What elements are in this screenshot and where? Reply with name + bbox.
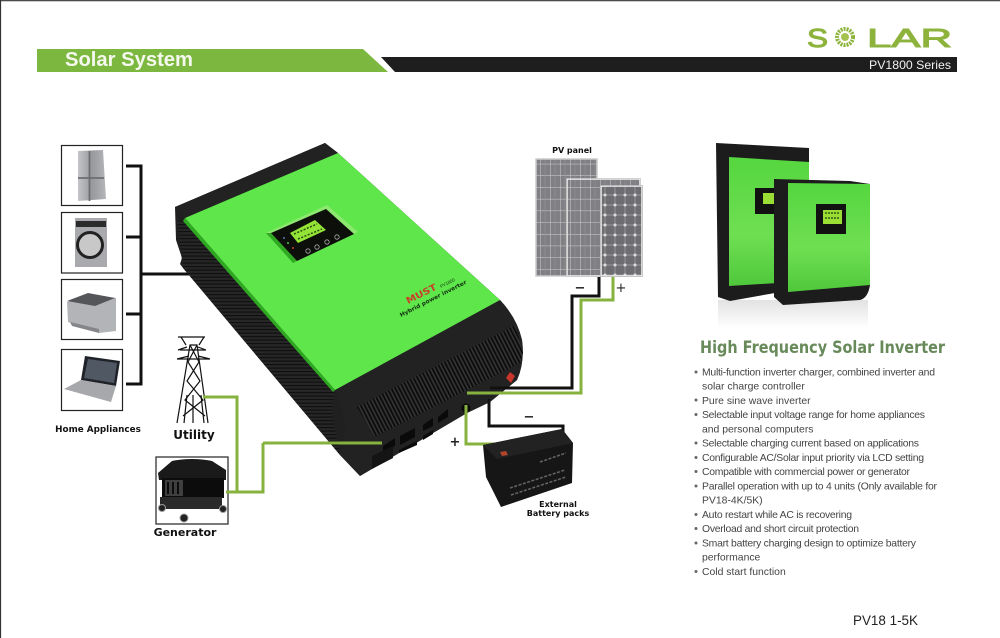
product photo: two inverters	[716, 143, 870, 328]
logo: SOLAR	[807, 23, 952, 53]
inverter AC wire end	[263, 442, 382, 444]
battery negative wire	[489, 399, 563, 433]
panel: laptop	[62, 350, 122, 410]
panel: printer	[62, 280, 122, 340]
feature list: Parallel operation with up to 4 units (Only available for	[702, 482, 938, 492]
header banner: Solar System	[37, 49, 388, 72]
power switch	[506, 372, 515, 383]
label: Generator: Generator	[154, 526, 217, 539]
model label: PV1800	[439, 277, 456, 289]
product label: Hybrid power inverter	[399, 280, 468, 319]
solar panel 1	[536, 159, 597, 276]
PV positive wire	[467, 277, 613, 393]
feature list: Smart battery charging design to optimize battery	[702, 538, 917, 550]
LCD buttons	[306, 235, 339, 253]
feature list: Overload and short circuit protection	[702, 524, 859, 535]
PV minus sign: −	[575, 281, 585, 296]
inverter front face	[335, 300, 523, 476]
inverter green front panel	[185, 153, 500, 390]
logo: SOLAR: LAR	[867, 23, 952, 53]
label: External Battery packs: Battery packs	[527, 509, 589, 518]
feature list: performance	[702, 552, 761, 564]
feature list: Configurable AC/Solar input priority via LCD setting	[702, 453, 924, 464]
battery positive wire	[466, 405, 503, 453]
inverter top cap	[175, 143, 338, 218]
icon: printer	[67, 293, 116, 333]
PV panel label: PV panel	[552, 146, 592, 155]
PV panels	[536, 159, 642, 276]
large inverter	[716, 143, 809, 301]
inverter body	[175, 143, 523, 476]
feature list: Compatible with commercial power or generator	[702, 467, 911, 478]
LCD bezel	[266, 205, 358, 263]
model code: PV18 1-5K: PV18 1-5K	[853, 613, 918, 628]
LCD indicator lights	[283, 237, 294, 249]
label: External Battery packs	[527, 500, 589, 518]
small inverter	[774, 179, 870, 305]
feature list: solar charge controller	[702, 382, 805, 392]
header bar: PV1800 Series	[381, 57, 957, 72]
reflection	[718, 300, 868, 328]
label: Home Appliances: Home Appliances	[55, 425, 141, 435]
header bar: PV1800 Series: PV1800 Series	[869, 58, 951, 72]
port socket	[462, 404, 470, 412]
icon: refrigerator	[78, 150, 106, 201]
battery minus sign: −	[524, 410, 534, 425]
label: External Battery packs: External	[539, 500, 577, 509]
panel: generator	[156, 457, 228, 524]
icon: washing machine	[75, 218, 107, 267]
feature list: Cold start function	[702, 567, 786, 578]
feature list	[694, 368, 938, 578]
icon: generator	[158, 459, 226, 522]
AC input wiring (green)	[203, 397, 263, 492]
PV negative wire	[490, 277, 599, 388]
LCD screen	[290, 220, 326, 243]
feature list: Multi-function inverter charger, combined inverter and	[702, 368, 935, 378]
appliance wiring	[126, 164, 192, 386]
heading: High Frequency Solar Inverter: High Frequency Solar Inverter	[700, 338, 946, 357]
feature list: Pure sine wave inverter	[702, 396, 811, 407]
LCD control panel	[271, 209, 354, 261]
inverter front vents	[357, 325, 523, 437]
header banner: Solar System: Solar System	[65, 49, 193, 71]
feature list: PV18-4K/5K)	[702, 496, 763, 506]
inverter side vents	[177, 218, 340, 455]
feature list: Auto restart while AC is recovering	[702, 510, 852, 521]
feature list: Selectable charging current based on applications	[702, 438, 919, 450]
panel: washing machine	[62, 212, 122, 273]
PV plus sign: +	[616, 281, 626, 296]
panel: refrigerator	[62, 146, 122, 206]
logo: SOLAR: S	[807, 23, 828, 53]
inverter main unit	[175, 143, 523, 476]
LCD shadow edge	[266, 233, 297, 263]
feature list: Selectable input voltage range for home appliances	[702, 410, 925, 421]
feature list: and personal computers	[702, 424, 813, 436]
label: Utility: Utility	[173, 428, 215, 442]
battery plus sign: +	[450, 435, 460, 450]
icon: utility tower	[177, 337, 210, 423]
solar panel 3	[600, 186, 642, 276]
icon: battery	[483, 429, 573, 507]
brand label: MUST	[405, 282, 440, 307]
icon: laptop	[64, 356, 120, 402]
inverter port cut-outs	[383, 409, 448, 453]
lower vents	[372, 446, 393, 469]
solar panel 2	[566, 178, 640, 276]
